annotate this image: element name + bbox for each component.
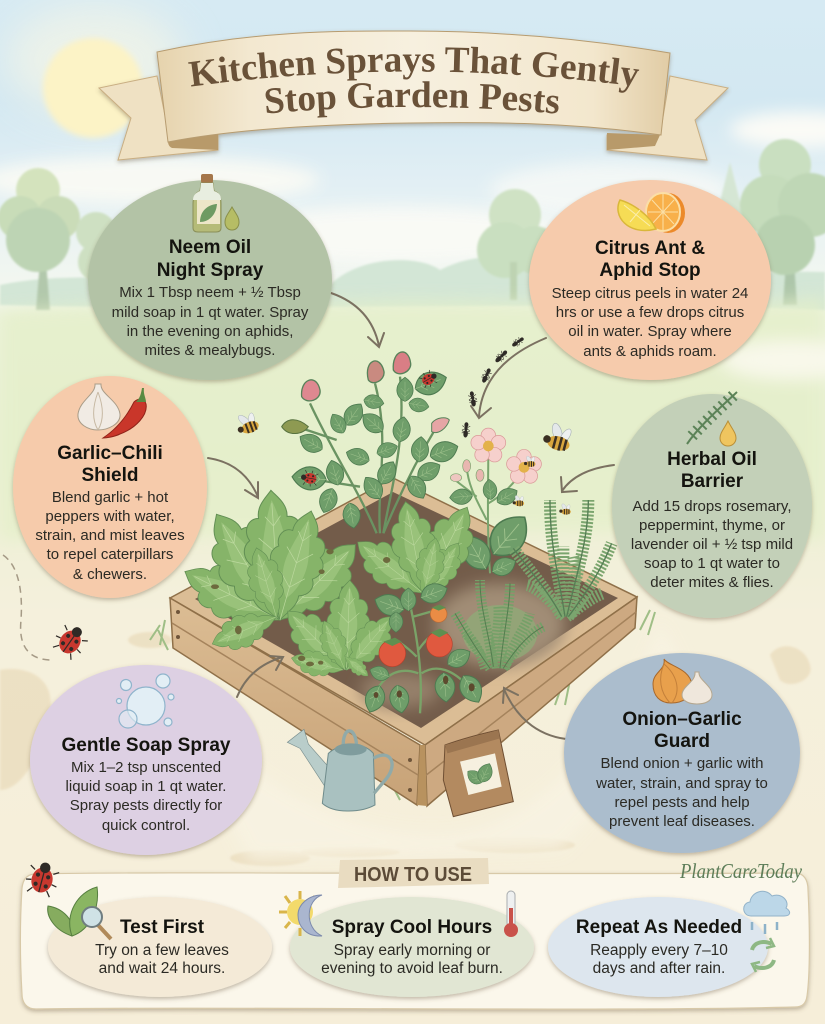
trees right — [714, 139, 825, 305]
step: repeat as needed: days and after rain. — [593, 960, 725, 977]
heading — [57, 443, 163, 486]
right front wall — [425, 597, 637, 806]
rose plant with buds and ladybugs — [282, 352, 461, 533]
icon: rosemary sprig — [687, 392, 737, 444]
body text: repel pests and help — [614, 794, 750, 811]
title: Kitchen Sprays That Gently — [188, 46, 640, 93]
icon: bubbles — [116, 674, 174, 728]
icon: oil drop — [225, 207, 239, 230]
arrow: neem to rose — [331, 293, 384, 347]
icon: garlic — [78, 384, 120, 430]
banner ribbon — [157, 31, 670, 142]
body text: oil in water. Spray where — [568, 323, 732, 340]
body text: Spray pests directly for — [70, 797, 222, 814]
icon: onion — [653, 659, 692, 703]
heading: Night Spray — [157, 260, 264, 281]
body text — [112, 284, 309, 359]
icon: rain cloud — [744, 891, 790, 934]
arrow: herbal to flowers — [561, 465, 614, 492]
step: repeat as needed: Reapply every 7–10 — [590, 942, 728, 959]
back lettuce — [345, 497, 488, 609]
arrow: garlic to lettuce — [208, 458, 258, 498]
body text: quick control. — [102, 817, 190, 834]
panel: onion garlic — [564, 653, 800, 853]
heading — [595, 238, 705, 281]
watering can — [287, 729, 392, 811]
heading: Citrus Ant & — [595, 238, 705, 259]
distant hills — [0, 257, 825, 310]
ladybug with dashed trail — [3, 555, 92, 662]
icon: recycle arrows — [752, 938, 774, 972]
left front wall — [170, 598, 420, 805]
icon: citrus slices — [618, 193, 685, 233]
title banner — [99, 31, 728, 160]
arrow: soap to lettuce — [237, 656, 283, 697]
icon: oil drop — [720, 421, 736, 446]
arrow: citrus to flowers — [471, 338, 546, 418]
icon: leaves and magnifier — [48, 887, 111, 939]
icon: thermometer — [504, 891, 518, 937]
heading: Aphid Stop — [599, 260, 701, 281]
raised garden bed — [150, 478, 655, 806]
panel: how to use — [20, 858, 809, 1009]
body text: ants & aphids roam. — [583, 343, 717, 360]
panel: garlic chili — [13, 376, 207, 598]
panel: herbal oil — [612, 392, 812, 618]
heading — [157, 237, 264, 281]
body text — [66, 759, 226, 834]
body text: Blend onion + garlic with — [600, 755, 764, 772]
tree middle — [477, 189, 559, 300]
body text: Steep citrus peels in water 24 — [552, 285, 748, 302]
brand mark: PlantCareToday — [679, 859, 803, 883]
body text: hrs or use a few drops citrus — [556, 304, 744, 321]
heading: Neem Oil — [169, 237, 251, 258]
icon: chili — [103, 388, 146, 438]
step: test first — [48, 887, 272, 997]
body text — [35, 489, 185, 583]
heading — [622, 709, 742, 752]
bed top frame — [170, 478, 637, 745]
garden plants — [173, 335, 612, 715]
heading: Barrier — [681, 471, 744, 492]
step: spray cool hours: Spray Cool Hours — [332, 917, 492, 938]
ground patch under bed — [150, 620, 700, 860]
body text: Mix 1–2 tsp unscented — [71, 759, 221, 776]
body text: & chewers. — [73, 566, 147, 583]
heading tag — [338, 858, 489, 888]
body text: Blend garlic + hot — [52, 489, 169, 506]
body text: liquid soap in 1 qt water. — [66, 778, 226, 795]
soil — [195, 492, 618, 728]
step: spray cool hours — [279, 891, 534, 997]
heading: Shield — [81, 465, 139, 486]
body text: prevent leaf diseases. — [609, 813, 755, 830]
body text: peppermint, thyme, or — [639, 517, 785, 534]
step: test first: and wait 24 hours. — [99, 960, 225, 977]
body text: to repel caterpillars — [47, 546, 173, 563]
body text: strain, and mist leaves — [35, 527, 185, 544]
trees left — [0, 168, 118, 310]
sun — [43, 38, 143, 138]
body text: in the evening on aphids, — [127, 323, 293, 340]
grass tufts — [150, 610, 655, 800]
body text: deter mites & flies. — [650, 574, 774, 591]
heading — [667, 449, 757, 492]
panel: gentle soap — [30, 665, 262, 855]
flowering plant — [449, 428, 541, 579]
rosemary plant — [513, 500, 612, 617]
heading: Garlic–Chili — [57, 443, 163, 464]
step: test first: Test First — [120, 917, 205, 938]
body text: mites & mealybugs. — [145, 342, 275, 359]
body text: Add 15 drops rosemary, — [633, 498, 791, 515]
thyme plant — [455, 580, 543, 668]
body text: lavender oil + ½ tsp mild — [631, 536, 793, 553]
title — [188, 46, 640, 118]
body text: mild soap in 1 qt water. Spray — [112, 304, 309, 321]
step: repeat as needed: Repeat As Needed — [576, 917, 742, 938]
heading: Herbal Oil — [667, 449, 757, 470]
heading: Gentle Soap Spray — [62, 735, 231, 756]
seed bag — [443, 730, 513, 817]
step: test first: Try on a few leaves — [95, 942, 229, 959]
body text — [552, 285, 748, 360]
meadow — [0, 296, 825, 540]
icon: oil bottle — [193, 174, 221, 232]
front lettuce — [274, 579, 404, 684]
body text — [595, 755, 768, 830]
right ribbon tail — [607, 76, 728, 160]
panel: neem oil — [88, 174, 332, 380]
ground stains — [0, 632, 811, 866]
step: spray cool hours: evening to avoid leaf burn. — [321, 960, 503, 977]
title: Stop Garden Pests — [266, 81, 558, 118]
body text: peppers with water, — [45, 508, 175, 525]
left ribbon tail — [99, 76, 218, 160]
heading tag: HOW TO USE — [354, 864, 472, 886]
step: repeat as needed — [548, 891, 790, 997]
ladybug — [23, 859, 62, 898]
heading: Onion–Garlic — [622, 709, 742, 730]
body text: soap to 1 qt water to — [644, 555, 780, 572]
arrow: onion to bed — [503, 688, 566, 739]
bees and ants — [233, 335, 575, 515]
body text: water, strain, and spray to — [595, 775, 768, 792]
tomato plant — [361, 579, 488, 715]
step: spray cool hours: Spray early morning or — [334, 942, 490, 959]
heading: Guard — [654, 731, 710, 752]
left lettuce — [173, 488, 373, 659]
body text: Mix 1 Tbsp neem + ½ Tbsp — [119, 284, 301, 301]
icon: sun and moon — [279, 891, 322, 936]
icon: garlic — [682, 672, 712, 704]
body text — [631, 498, 793, 591]
panel: citrus — [529, 180, 771, 380]
